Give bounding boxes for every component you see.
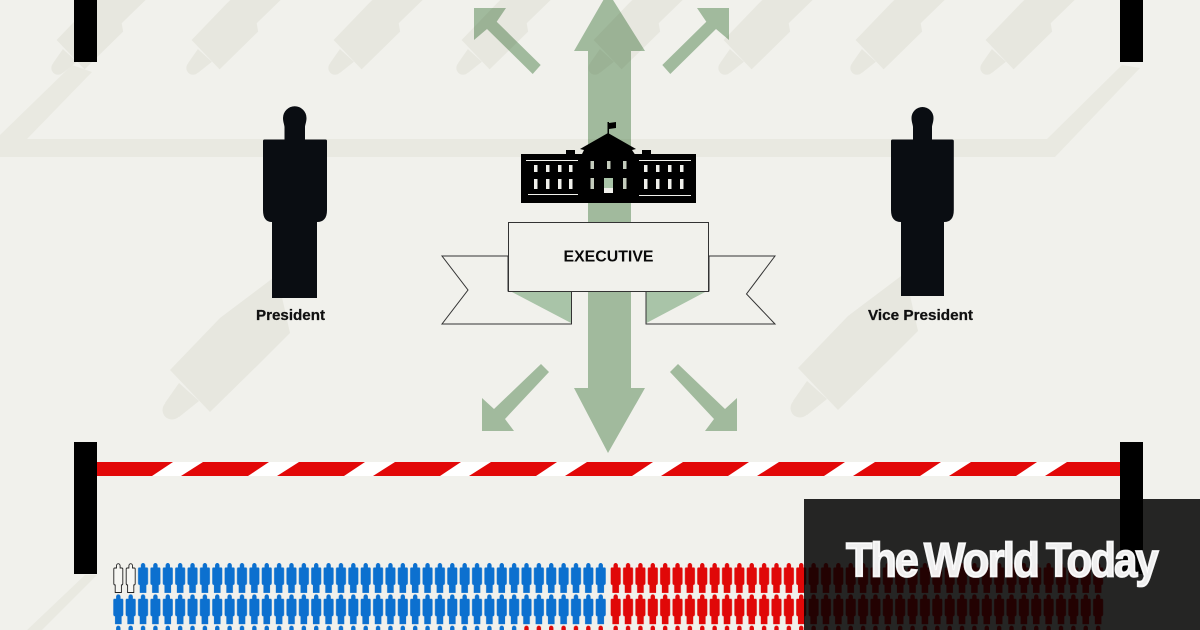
ribbon centre box: [508, 222, 708, 292]
figure: Vice President: [891, 107, 954, 296]
arrow: south-east: [670, 364, 737, 431]
ribbon: executive banner: [442, 222, 775, 324]
bottom right post: [1120, 442, 1143, 574]
arrow: vertical double-headed: [574, 0, 645, 453]
ribbon tail: left: [442, 256, 572, 324]
row 2 blue: [112, 594, 607, 624]
panel: publication logo: [804, 499, 1200, 630]
ribbon fold: left: [510, 291, 571, 323]
top left post: [74, 0, 97, 62]
row 3 red, right part: [610, 626, 1104, 630]
row 3 blue: [112, 626, 520, 630]
arrow: south-west: [482, 364, 549, 431]
figure: President: [263, 106, 327, 298]
label: Vice President: Vice President: [868, 308, 973, 324]
row 1 red: [610, 563, 1104, 593]
arrow: north-west: [474, 8, 541, 74]
cordon: red and white striped barrier: [97, 462, 1120, 476]
title: The World Today: [846, 534, 1159, 588]
icon: White House: [521, 122, 696, 203]
arrows radiating from the executive: [474, 0, 737, 453]
arrow: north-east: [662, 8, 729, 74]
row 3 red, left part: [520, 626, 607, 630]
pictogram: seats of congress: [112, 563, 1104, 630]
bottom left post: [74, 442, 97, 574]
top right post: [1120, 0, 1143, 62]
heading: EXECUTIVE: EXECUTIVE: [564, 248, 654, 266]
ribbon tail: right: [646, 256, 775, 324]
title: The World Today: Today: [1046, 534, 1159, 588]
label: President: President: [256, 308, 325, 324]
row 1 blue: [137, 563, 607, 593]
row 2 red: [610, 594, 1104, 624]
ribbon fold: right: [646, 291, 707, 323]
outlined vacant seats: [114, 564, 135, 592]
title: The World Today: World: [924, 534, 1038, 588]
title: The World Today: The: [846, 534, 918, 588]
